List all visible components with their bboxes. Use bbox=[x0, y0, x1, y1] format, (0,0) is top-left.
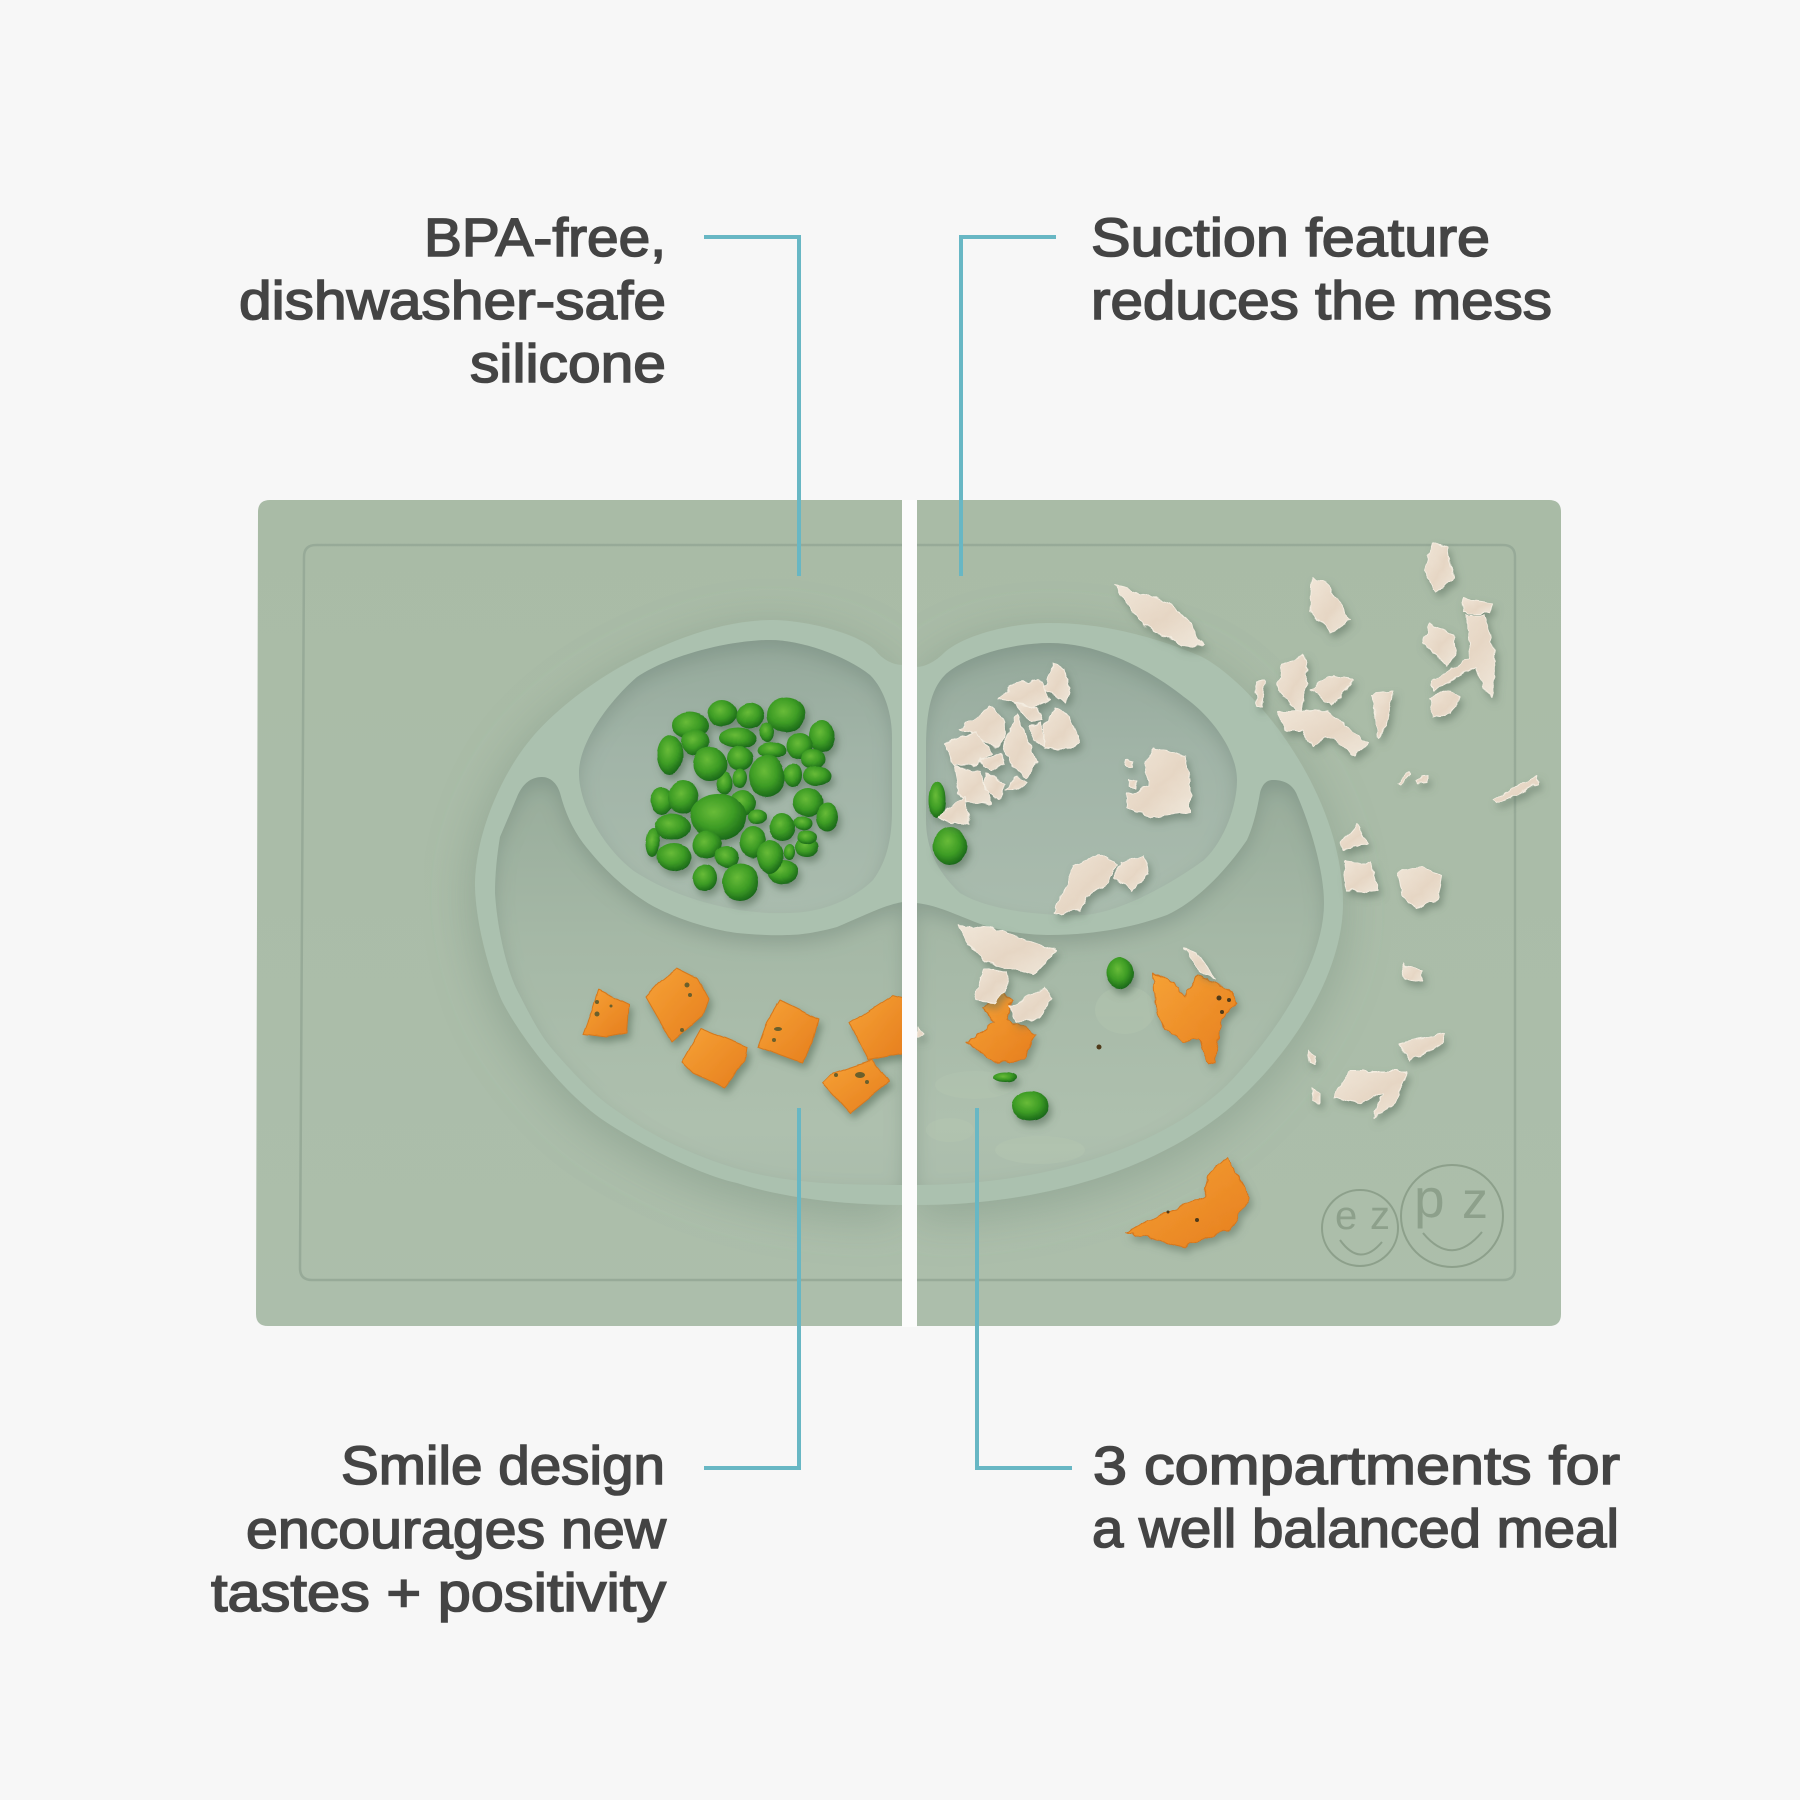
leader line: BPA-free bbox=[704, 237, 799, 576]
embossed logo bbox=[1322, 1165, 1503, 1267]
leader line: compartments bbox=[977, 1108, 1072, 1468]
small circle face bbox=[1322, 1190, 1398, 1266]
leader line: suction bbox=[961, 237, 1056, 576]
callout: compartments: a well balanced meal bbox=[1092, 1499, 1619, 1559]
callout: BPA-free bbox=[239, 208, 666, 394]
plate right half bbox=[916, 623, 1343, 1205]
callout: BPA-free: dishwasher-safe bbox=[239, 271, 666, 331]
small e letter: e bbox=[1335, 1194, 1357, 1238]
large p letter: p bbox=[1414, 1167, 1445, 1229]
inner groove right bbox=[916, 545, 1515, 1280]
center split bbox=[902, 500, 917, 1327]
carrot specks right bbox=[1096, 996, 1231, 1222]
callout: compartments bbox=[1092, 1436, 1620, 1559]
leader line: smile design bbox=[704, 1108, 799, 1468]
main compartment left bbox=[495, 777, 903, 1185]
stray peas bbox=[928, 782, 1134, 1121]
carrot specks bbox=[594, 982, 869, 1084]
eye compartment left bbox=[579, 640, 892, 913]
callout: suction: reduces the mess bbox=[1091, 271, 1552, 331]
peas bbox=[646, 697, 838, 901]
plate rim left bbox=[475, 620, 903, 1205]
large smile bbox=[1423, 1232, 1482, 1250]
mat surface right bbox=[916, 500, 1561, 1326]
large z letter: z bbox=[1462, 1172, 1488, 1230]
carrot scraps bbox=[967, 972, 1250, 1247]
main compartment right bbox=[916, 780, 1324, 1185]
callout: smile design: encourages new bbox=[246, 1500, 667, 1560]
food smears bbox=[926, 986, 1155, 1164]
callout: smile design: Smile design bbox=[341, 1436, 665, 1496]
plate rim right bbox=[916, 623, 1343, 1205]
mat: right half with scattered food bbox=[916, 500, 1561, 1326]
eye compartment right bbox=[926, 643, 1237, 915]
small z letter: z bbox=[1370, 1194, 1390, 1238]
chicken scraps bbox=[917, 544, 1538, 1117]
plate left half bbox=[475, 620, 903, 1205]
carrots bbox=[583, 968, 904, 1113]
callout: suction: Suction feature bbox=[1091, 208, 1490, 268]
mat: left half with peas and carrots bbox=[256, 500, 904, 1326]
callout: smile design: tastes + positivity bbox=[211, 1563, 666, 1623]
mat surface left bbox=[256, 500, 903, 1326]
callout: smile design bbox=[211, 1436, 667, 1623]
callout: suction bbox=[1091, 208, 1552, 331]
callout: compartments: 3 compartments for bbox=[1093, 1436, 1620, 1496]
inner groove left bbox=[300, 545, 903, 1280]
callout: BPA-free: silicone bbox=[470, 334, 666, 394]
small smile bbox=[1340, 1240, 1382, 1255]
callout: BPA-free: BPA-free, bbox=[424, 208, 666, 268]
large circle face bbox=[1401, 1165, 1503, 1267]
